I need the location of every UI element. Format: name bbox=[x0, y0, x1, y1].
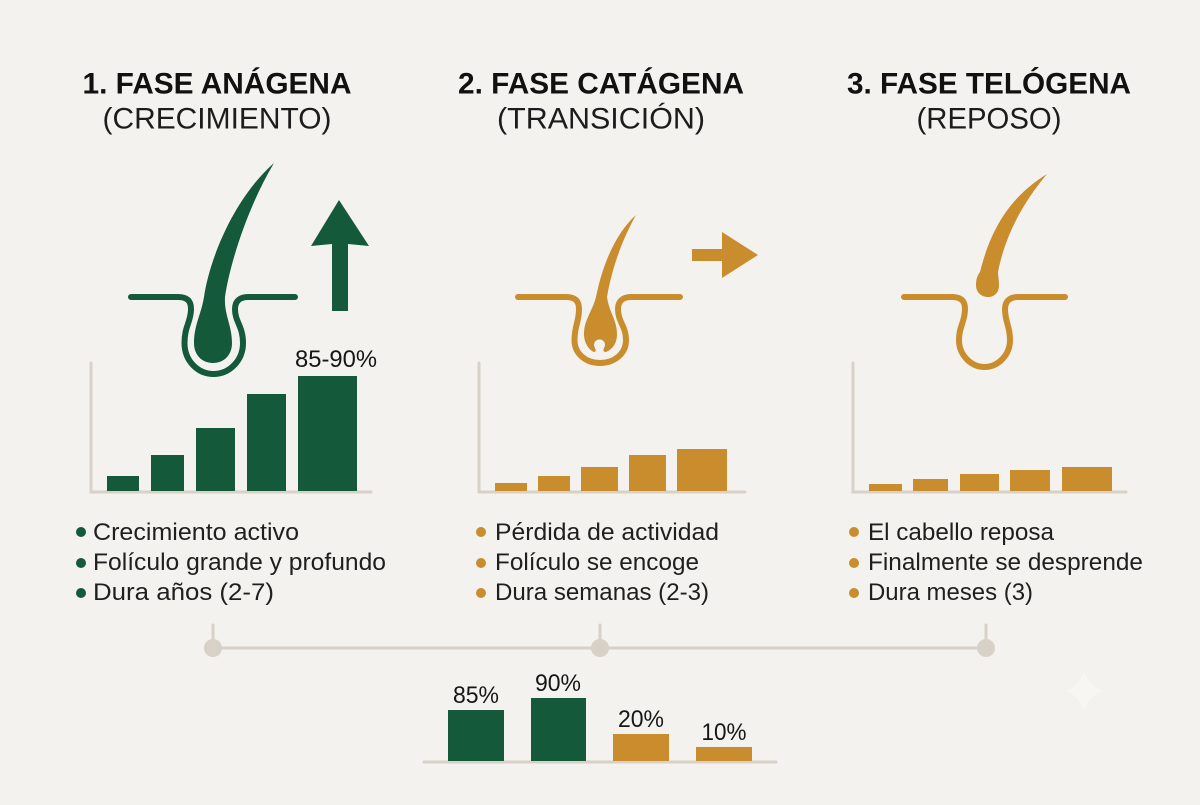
bar chart: summary percentages: 85% bbox=[453, 682, 499, 709]
icon: shrinking hair follicle bbox=[518, 215, 680, 363]
bullet list: fase telógena: Dura meses (3) bbox=[868, 579, 1033, 606]
bar chart: growth: 85-90% bbox=[295, 346, 377, 373]
bullet list: fase catágena: Dura semanas (2-3) bbox=[495, 579, 709, 606]
heading: fase catágena bbox=[458, 66, 744, 136]
bar chart: summary percentages: 10% bbox=[702, 719, 746, 746]
panel: fase catágena bbox=[458, 66, 758, 606]
bar chart: rest bbox=[853, 363, 1126, 492]
bullet list: fase anágena bbox=[76, 519, 386, 606]
icon: resting hair follicle bbox=[904, 174, 1065, 367]
panel: fase anágena bbox=[76, 66, 386, 606]
heading: fase telógena: (REPOSO) bbox=[916, 102, 1062, 136]
heading: fase catágena: (TRANSICIÓN) bbox=[497, 102, 705, 136]
icon: up arrow bbox=[311, 200, 369, 311]
heading: fase anágena bbox=[82, 66, 352, 136]
heading: fase telógena: 3. FASE TELÓGENA bbox=[847, 66, 1131, 100]
bullet list: fase telógena: El cabello reposa bbox=[868, 519, 1055, 546]
bar chart: growth bbox=[91, 346, 377, 492]
icon: right arrow bbox=[692, 232, 758, 278]
heading: fase anágena: (CRECIMIENTO) bbox=[102, 102, 332, 136]
timeline connector bbox=[204, 625, 995, 657]
bullet list: fase anágena: Folículo grande y profundo bbox=[93, 549, 386, 576]
icon: growing hair follicle bbox=[131, 163, 295, 374]
heading: fase telógena bbox=[847, 66, 1131, 136]
bar chart: summary percentages bbox=[424, 670, 776, 762]
bar chart: summary percentages: 20% bbox=[618, 706, 664, 733]
bar chart: summary percentages: 90% bbox=[535, 670, 581, 697]
bullet list: fase telógena: Finalmente se desprende bbox=[868, 549, 1143, 576]
bar chart: transition bbox=[479, 363, 745, 492]
heading: fase catágena: 2. FASE CATÁGENA bbox=[458, 66, 744, 100]
panel: fase telógena bbox=[847, 66, 1143, 606]
heading: fase anágena: 1. FASE ANÁGENA bbox=[82, 66, 352, 100]
bullet list: fase anágena: Crecimiento activo bbox=[93, 519, 299, 546]
bullet list: fase anágena: Dura años (2-7) bbox=[93, 579, 274, 606]
bullet list: fase catágena bbox=[476, 519, 719, 606]
bullet list: fase telógena bbox=[849, 519, 1143, 606]
icon: sparkle bbox=[1066, 670, 1104, 712]
bullet list: fase catágena: Pérdida de actividad bbox=[495, 519, 719, 546]
bullet list: fase catágena: Folículo se encoge bbox=[495, 549, 699, 576]
